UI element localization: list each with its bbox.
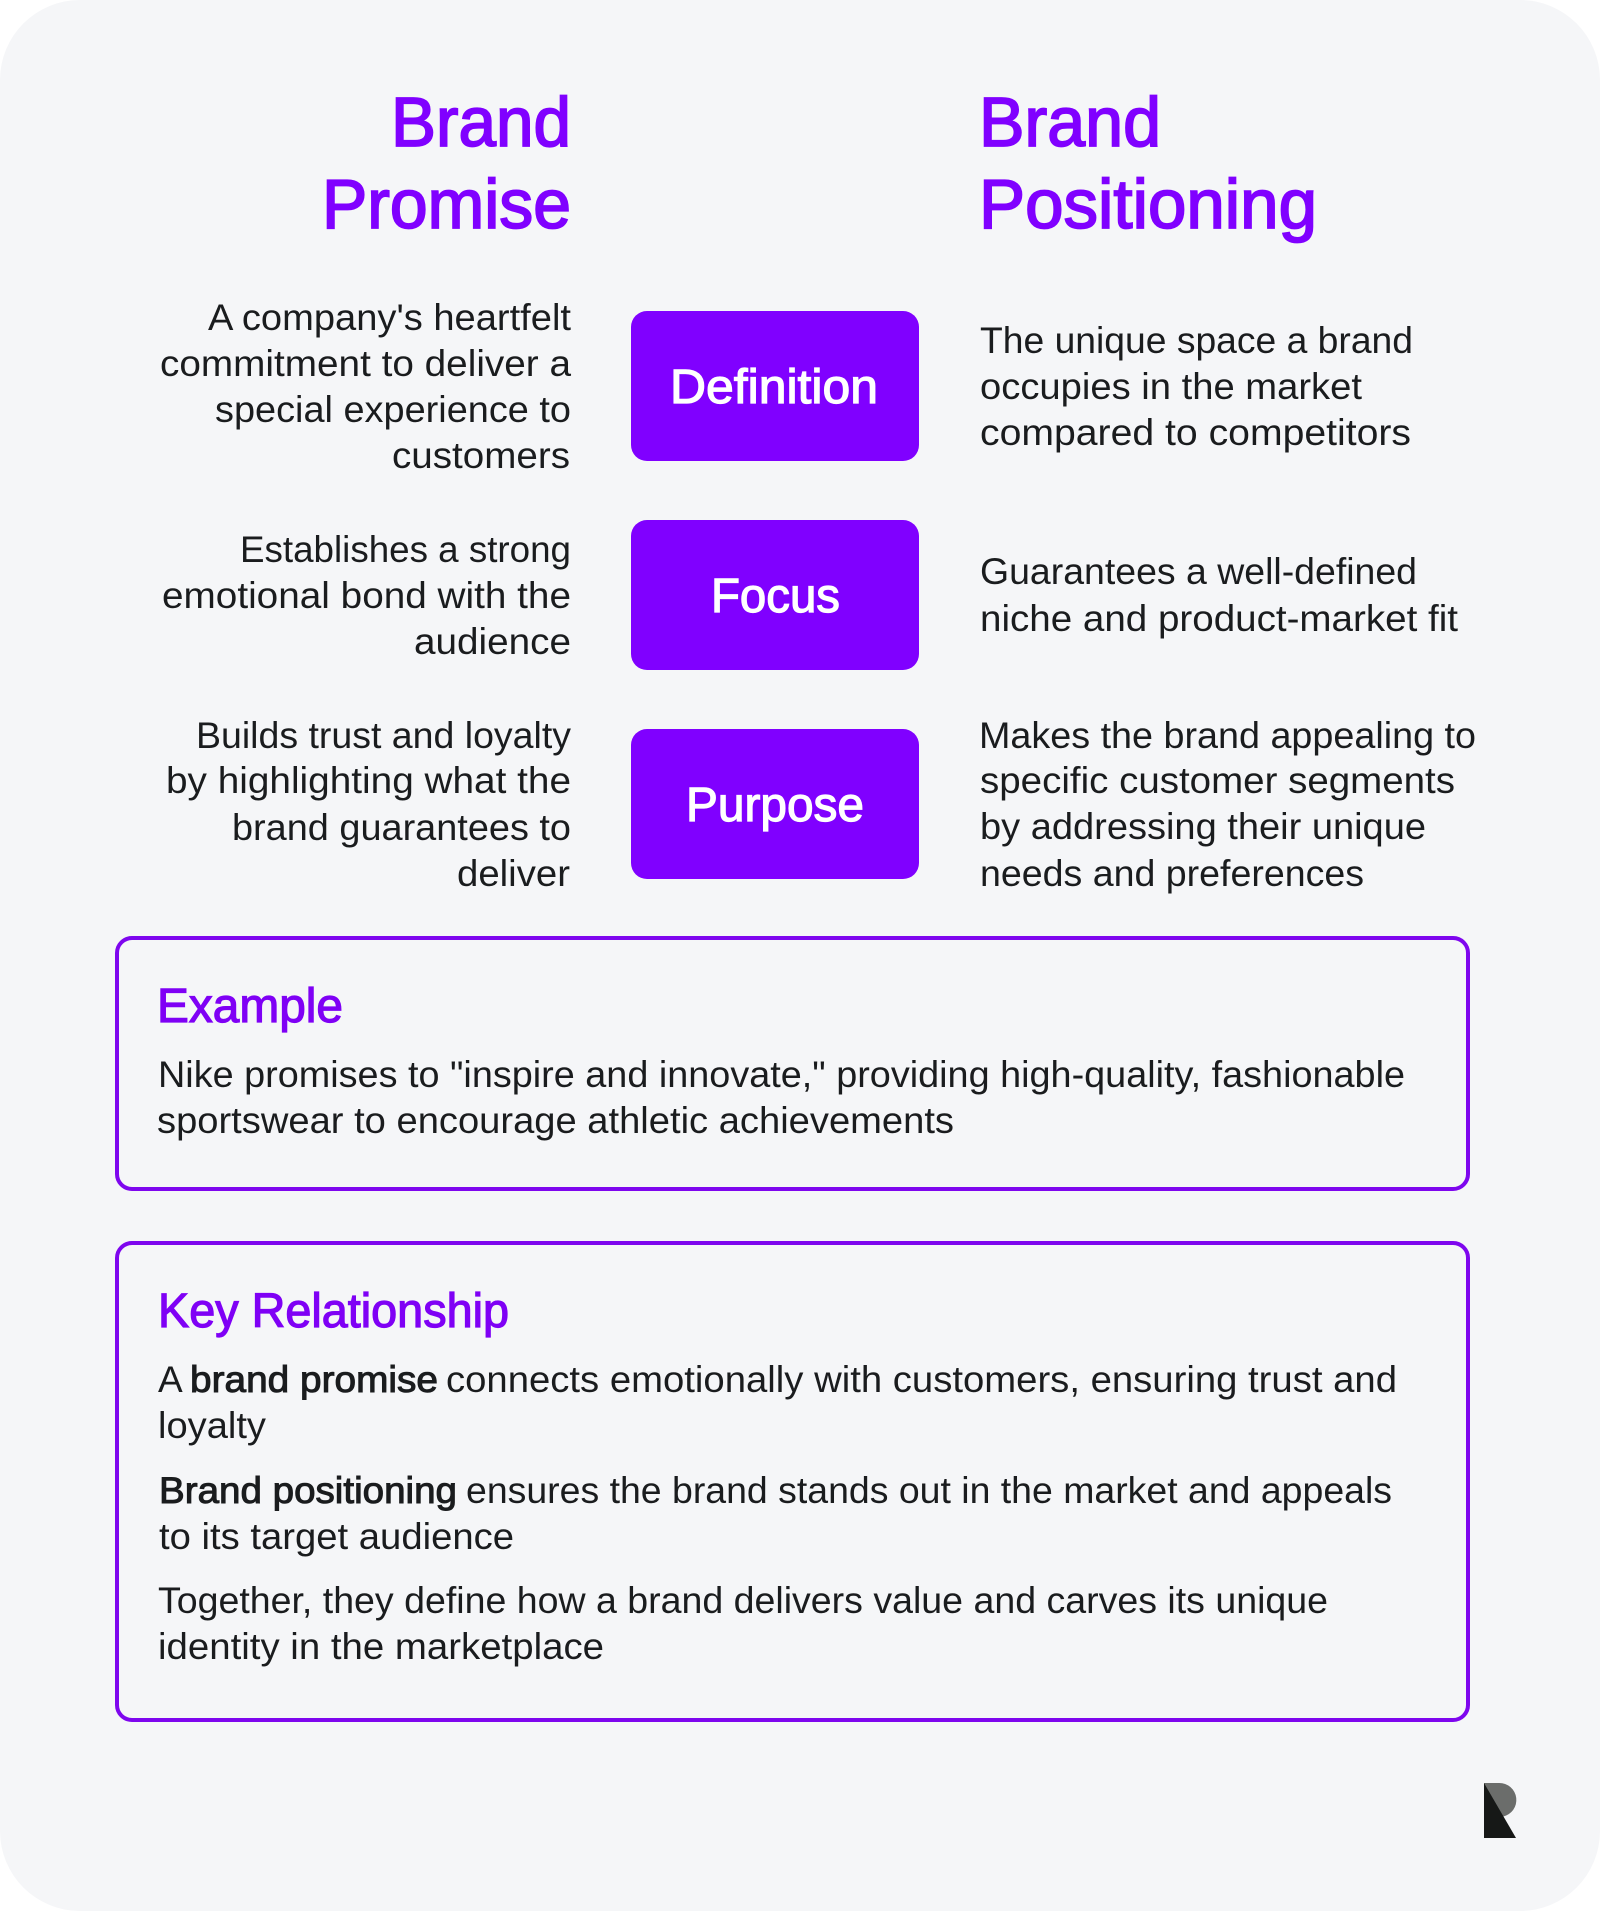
heading: Brand Positioning: Positioning bbox=[979, 165, 1317, 243]
button: Focus bbox=[631, 520, 919, 670]
button: Purpose: Purpose bbox=[686, 779, 864, 832]
text: brand positioning purpose: by addressing their unique bbox=[980, 806, 1426, 847]
text: brand promise definition: special experience to bbox=[215, 389, 571, 430]
button: Purpose bbox=[631, 729, 919, 879]
text: brand promise purpose: brand guarantees to bbox=[232, 807, 571, 848]
brand promise statement: loyalty bbox=[158, 1405, 266, 1446]
button: Definition: Definition bbox=[670, 361, 878, 414]
example body text: sportswear to encourage athletic achievements bbox=[157, 1100, 954, 1141]
text: brand promise focus: Establishes a strong bbox=[240, 529, 571, 570]
icon: brand logo bbox=[1484, 1783, 1516, 1838]
text: brand positioning definition: occupies in the market bbox=[980, 366, 1363, 407]
brand promise statement: A bbox=[158, 1359, 183, 1400]
heading: Brand Promise: Brand bbox=[391, 83, 571, 161]
text: brand positioning focus: niche and product-market fit bbox=[980, 598, 1459, 639]
together statement: identity in the marketplace bbox=[158, 1626, 604, 1667]
text: brand promise definition: A company's heartfelt bbox=[208, 297, 572, 338]
heading: Brand Positioning: Brand bbox=[979, 83, 1161, 161]
text: brand promise focus bbox=[162, 529, 571, 662]
text: brand positioning purpose: specific customer segments bbox=[980, 760, 1455, 801]
heading: Brand Positioning bbox=[979, 83, 1317, 243]
example body text bbox=[157, 1054, 1405, 1141]
text: brand positioning definition: compared to competitors bbox=[980, 412, 1411, 453]
brand positioning statement: to its target audience bbox=[159, 1516, 514, 1557]
text: brand promise definition: customers bbox=[392, 435, 570, 476]
text: brand positioning purpose bbox=[979, 715, 1476, 894]
text: brand promise purpose: by highlighting what the bbox=[166, 760, 571, 801]
heading: Brand Promise bbox=[322, 83, 571, 243]
button: Focus: Focus bbox=[711, 570, 840, 623]
brand promise statement: brand promise bbox=[190, 1359, 438, 1400]
brand promise statement bbox=[158, 1359, 1397, 1446]
text: brand positioning focus bbox=[980, 551, 1459, 639]
example heading: Example bbox=[157, 980, 343, 1033]
text: brand promise purpose: Builds trust and loyalty bbox=[196, 715, 571, 756]
text: brand promise purpose bbox=[166, 715, 571, 894]
text: brand promise definition: commitment to deliver a bbox=[160, 343, 571, 384]
brand promise statement: connects emotionally with customers, ensuring trust and bbox=[446, 1359, 1397, 1400]
together statement: Together, they define how a brand delivers value and carves its unique bbox=[158, 1580, 1328, 1621]
brand positioning statement bbox=[159, 1470, 1392, 1557]
together statement bbox=[158, 1580, 1328, 1667]
panel: example bbox=[117, 938, 1468, 1189]
panel: key relationship bbox=[117, 1243, 1468, 1720]
text: brand positioning focus: Guarantees a well-defined bbox=[980, 551, 1417, 592]
key relationship heading: Key Relationship bbox=[158, 1285, 509, 1338]
heading: Brand Promise: Promise bbox=[322, 165, 571, 243]
text: brand positioning purpose: Makes the brand appealing to bbox=[979, 715, 1476, 756]
brand positioning statement: ensures the brand stands out in the market and appeals bbox=[466, 1470, 1392, 1511]
text: brand promise focus: emotional bond with the bbox=[162, 575, 571, 616]
text: brand positioning definition bbox=[980, 320, 1413, 453]
text: brand positioning purpose: needs and preferences bbox=[980, 853, 1364, 894]
text: brand promise purpose: deliver bbox=[457, 853, 570, 894]
text: brand promise focus: audience bbox=[414, 621, 571, 662]
text: brand positioning definition: The unique space a brand bbox=[980, 320, 1413, 361]
example body text: Nike promises to "inspire and innovate," providing high-quality, fashionable bbox=[158, 1054, 1405, 1095]
button: Definition bbox=[631, 311, 919, 461]
brand positioning statement: Brand positioning bbox=[159, 1470, 457, 1511]
text: brand promise definition bbox=[160, 297, 572, 476]
